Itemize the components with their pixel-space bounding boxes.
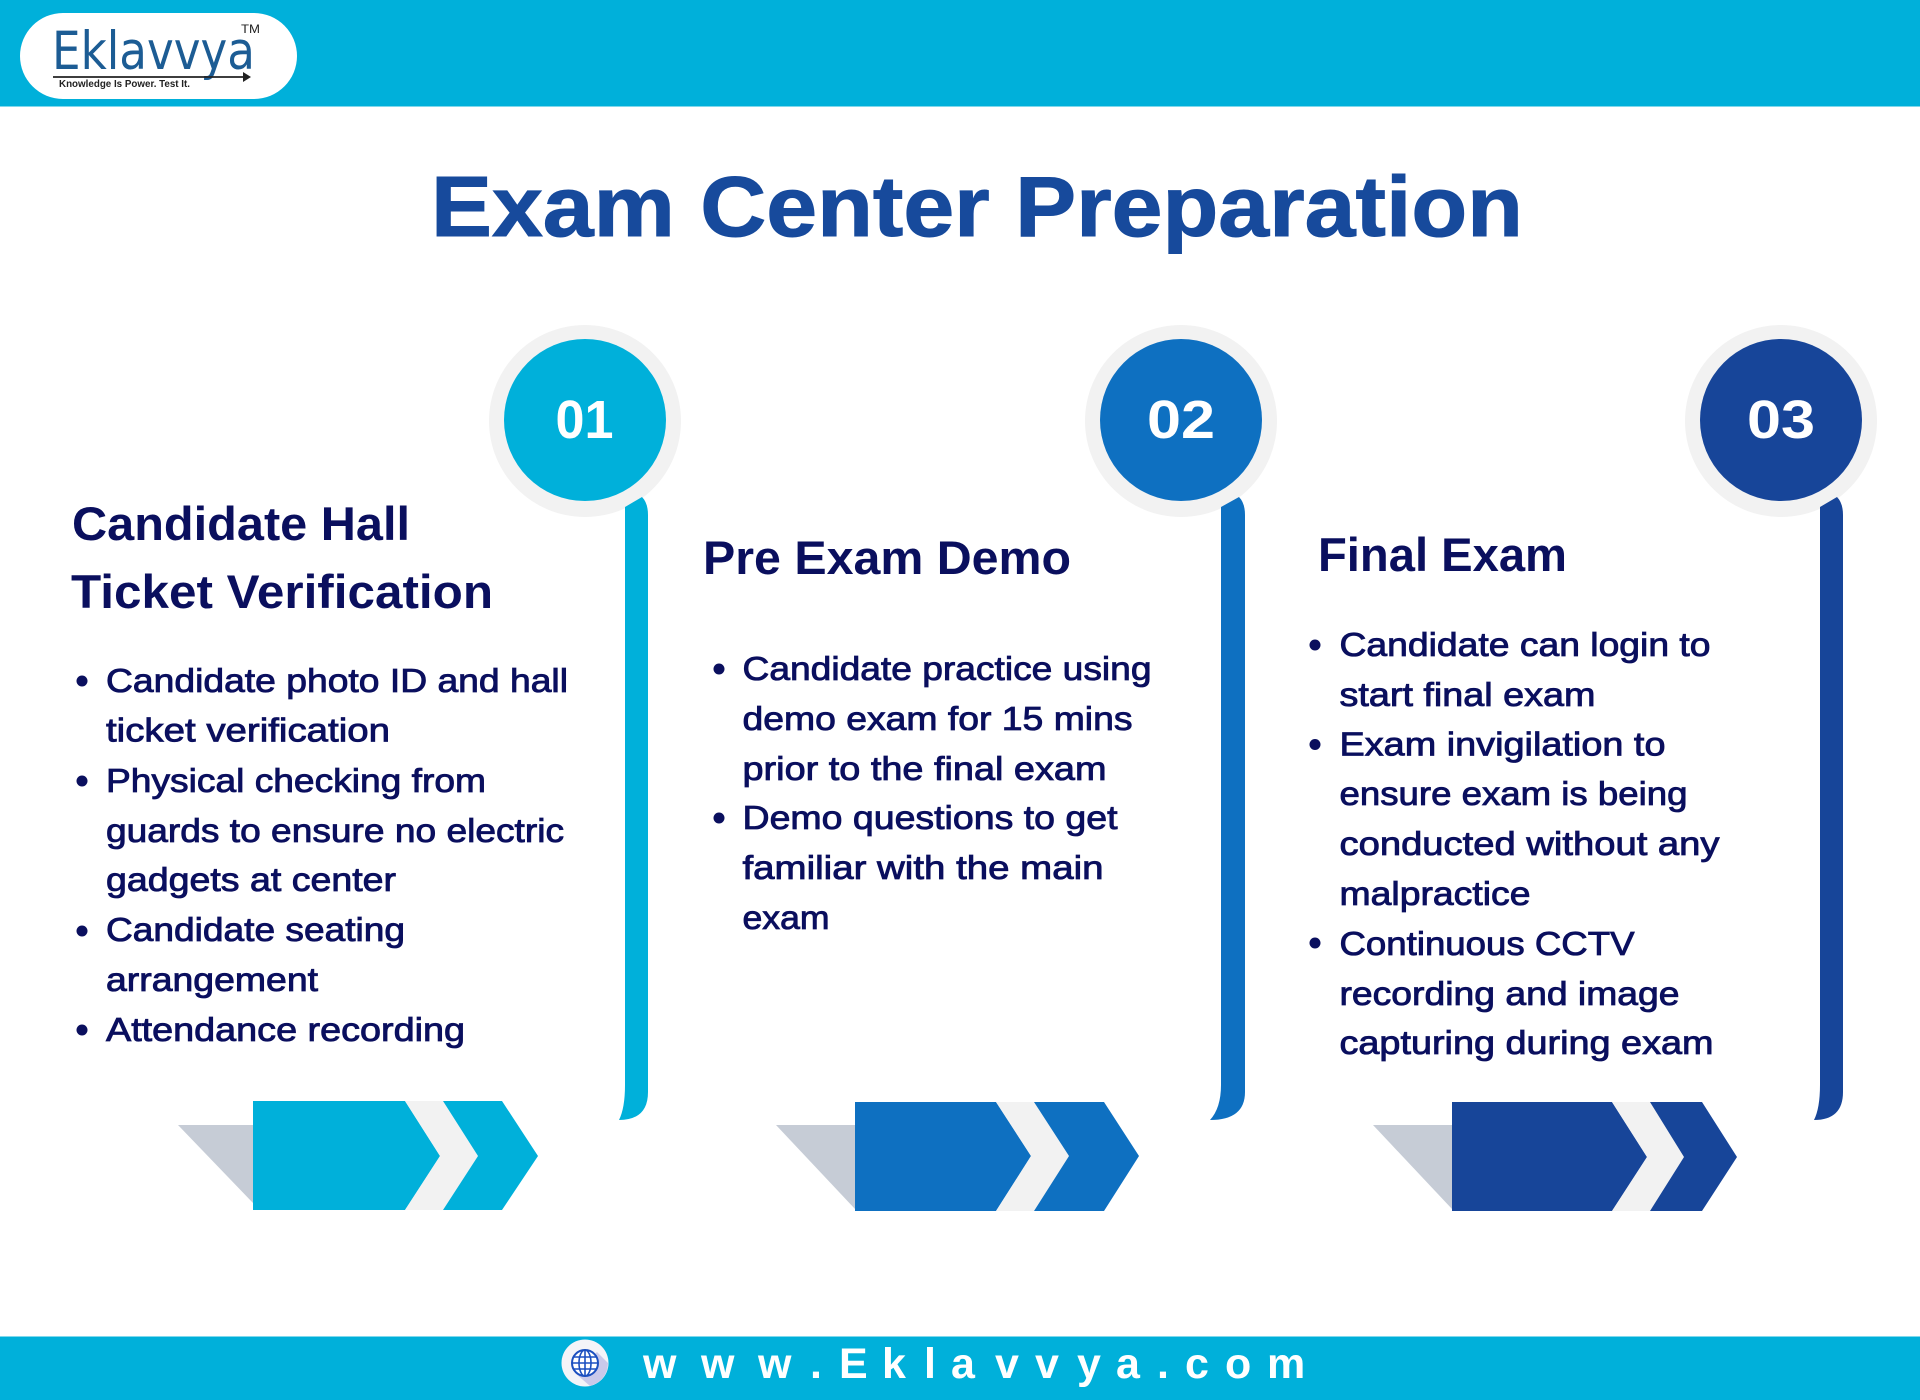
heading: final exam: Final Exam: [1318, 528, 1567, 581]
step 1: circle and bar: 01: [556, 390, 614, 450]
list: step 1: guards to ensure no electric: [106, 812, 564, 849]
list: step 3: recording and image: [1340, 975, 1680, 1012]
footer url: www.Eklavvya.com: [642, 1340, 1305, 1388]
list: step 1: [76, 662, 568, 1048]
step 3: circle and bar: [1685, 325, 1877, 1120]
logo: TM: [241, 22, 260, 36]
arrow: step 1: [178, 1101, 538, 1210]
list: step 1: gadgets at center: [106, 861, 396, 898]
list: step 1: Physical checking from: [106, 762, 486, 799]
heading: candidate hall ticket verification: Ticket Verification: [71, 565, 493, 618]
heading: candidate hall ticket verification: [71, 497, 493, 618]
footer band: [0, 1336, 1920, 1400]
list: step 3: Candidate can login to: [1340, 626, 1710, 663]
list: step 2: prior to the final exam: [742, 750, 1106, 787]
list: step 2: Candidate practice using: [742, 650, 1152, 687]
list: step 1: arrangement: [106, 961, 318, 998]
list: step 2: exam: [742, 899, 830, 936]
heading: candidate hall ticket verification: Candidate Hall: [72, 497, 410, 550]
logo: [20, 13, 297, 99]
list: step 1: Candidate photo ID and hall: [106, 662, 568, 699]
arrow: step 2: [776, 1102, 1139, 1211]
list: step 3: [1310, 626, 1720, 1061]
list: step 3: Continuous CCTV: [1340, 925, 1634, 962]
step 2: circle and bar: [1085, 325, 1277, 1120]
title: Exam Center Preparation: [431, 160, 1523, 255]
header band: [0, 0, 1920, 106]
list: step 2: [714, 650, 1152, 936]
list: step 3: start final exam: [1340, 676, 1596, 713]
list: step 3: ensure exam is being: [1340, 775, 1688, 812]
list: step 1: ticket verification: [106, 712, 390, 748]
step 3: circle and bar: 03: [1747, 390, 1815, 450]
logo: Eklavvya: [52, 21, 255, 82]
step 2: circle and bar: 02: [1147, 390, 1215, 450]
step 1: circle and bar: [489, 325, 681, 1120]
icon: globe: [562, 1340, 608, 1386]
list: step 1: Attendance recording: [106, 1011, 465, 1048]
arrow: step 3: [1373, 1102, 1737, 1211]
list: step 2: demo exam for 15 mins: [742, 700, 1132, 737]
logo: Knowledge Is Power. Test It.: [59, 78, 190, 90]
list: step 3: conducted without any: [1340, 825, 1720, 862]
list: step 2: familiar with the main: [742, 849, 1104, 886]
list: step 3: capturing during exam: [1340, 1024, 1714, 1061]
list: step 3: malpractice: [1340, 875, 1530, 912]
list: step 1: Candidate seating: [106, 911, 405, 948]
heading: pre exam demo: Pre Exam Demo: [703, 531, 1071, 584]
list: step 2: Demo questions to get: [742, 799, 1118, 836]
list: step 3: Exam invigilation to: [1340, 726, 1666, 762]
